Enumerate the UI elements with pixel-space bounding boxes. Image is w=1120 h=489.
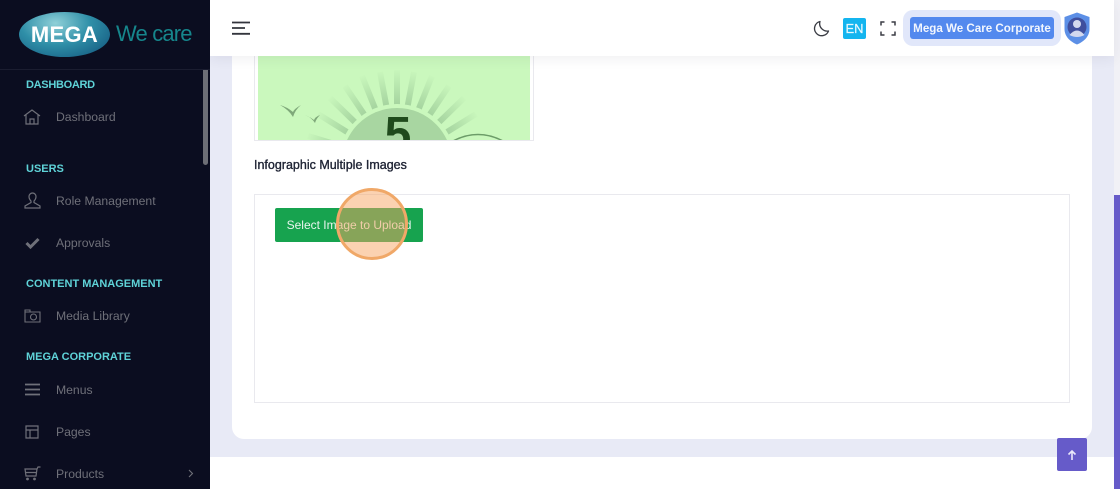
logo: [0, 0, 211, 70]
icon: home: [24, 109, 40, 125]
item: Menus: Menus: [56, 383, 93, 397]
item: Role Management: Role Management: [56, 194, 156, 208]
upload button: Select Image to Upload: [287, 218, 411, 232]
logo wordmark MEGA: MEGA: [31, 22, 98, 47]
upload button: [275, 208, 423, 242]
icon: menus: [25, 384, 40, 396]
icon: cart: [24, 466, 40, 480]
item: Pages: Pages: [56, 425, 91, 439]
upload panel: [254, 194, 1070, 403]
item: Approvals: Approvals: [56, 236, 110, 250]
icon: moon: [814, 20, 830, 36]
item: Dashboard: Dashboard: [56, 110, 116, 124]
back to top button: [1057, 438, 1087, 471]
item: Media Library: Media Library: [56, 309, 130, 323]
section: USERS: USERS: [26, 163, 64, 175]
user menu pill: [903, 10, 1061, 46]
sidebar: [0, 0, 210, 489]
heading: Infographic Multiple Images: Infographic Multiple Images: [254, 158, 407, 172]
icon: user shield: [1064, 12, 1090, 44]
logo wordmark We care: We care: [116, 21, 192, 46]
language badge: [843, 18, 866, 39]
image preview frame: [254, 40, 534, 141]
page background: [210, 56, 1114, 457]
icon: pages: [25, 425, 39, 439]
scrollbar: [1114, 0, 1120, 489]
sidebar scrollbar: [203, 70, 208, 165]
section: CONTENT MANAGEMENT: CONTENT MANAGEMENT: [26, 278, 162, 290]
icon: check: [26, 238, 40, 249]
icon: fullscreen: [880, 21, 896, 36]
icon: media: [24, 310, 41, 322]
language badge: EN: [845, 21, 864, 36]
user name: Mega We Care Corporate: [913, 22, 1051, 35]
top header: [210, 0, 1114, 56]
logo ellipse: [19, 12, 110, 57]
icon: up arrow: [1068, 450, 1076, 460]
icon: hamburger menu: [232, 22, 250, 35]
user name: [910, 17, 1054, 39]
main card: [232, 40, 1092, 439]
icon: user: [24, 192, 41, 209]
section: DASHBOARD: DASHBOARD: [26, 79, 95, 91]
infographic thumbnail: [258, 56, 530, 140]
icon: chevron: [188, 470, 194, 478]
item: Products: Products: [56, 467, 104, 481]
click highlight: [336, 188, 408, 260]
section: MEGA CORPORATE: MEGA CORPORATE: [26, 351, 131, 363]
